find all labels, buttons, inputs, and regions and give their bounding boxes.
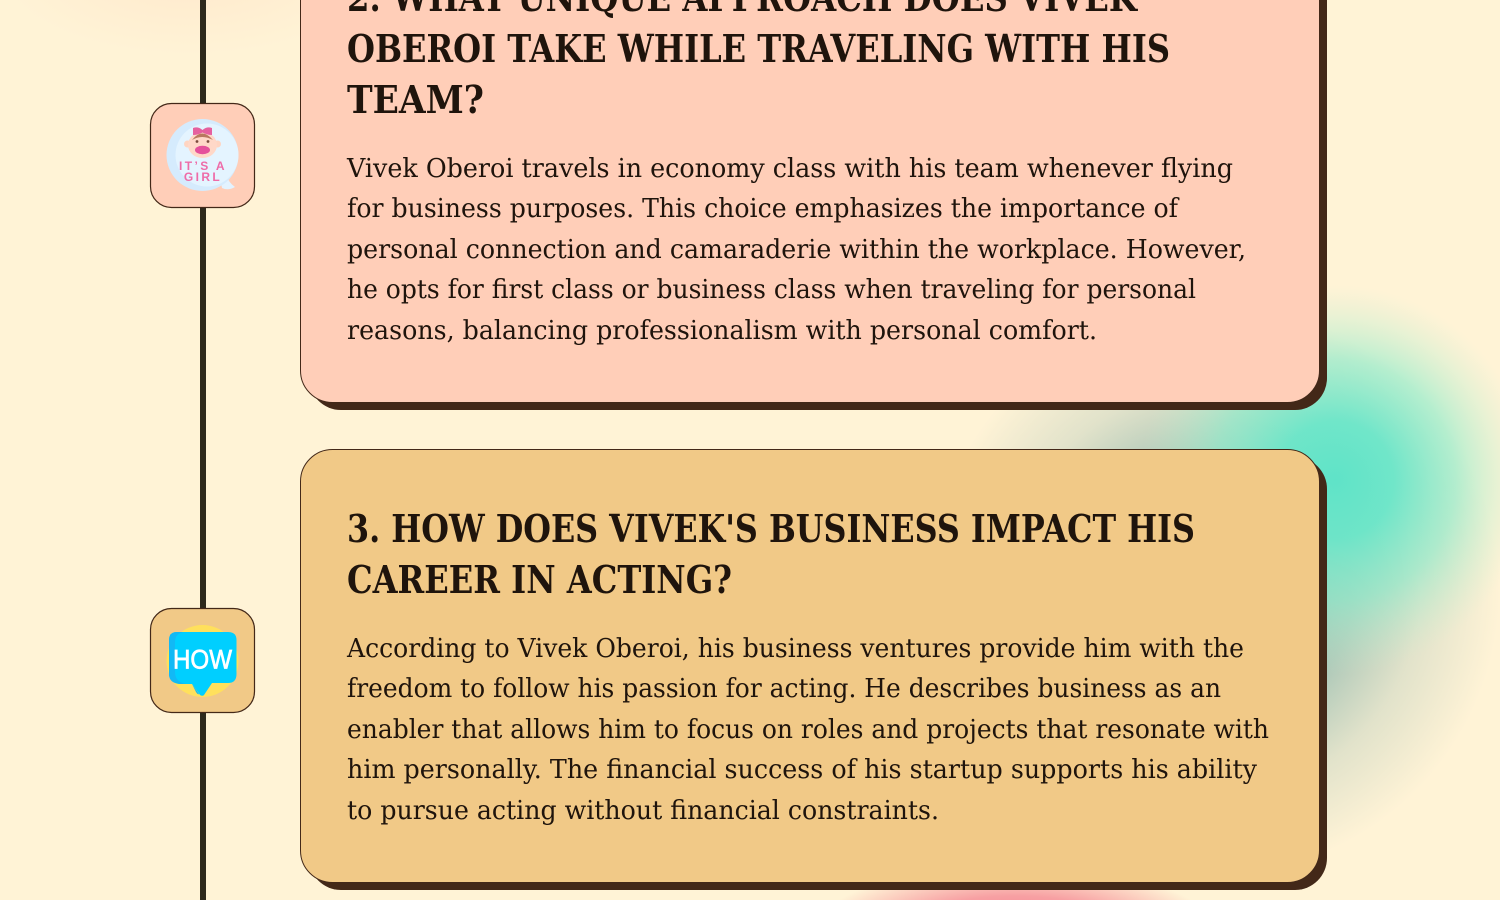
bubble shade <box>169 632 199 694</box>
glow: slate <box>930 305 1500 900</box>
glow: peach <box>0 0 380 70</box>
heading: question 3: CAREER IN ACTING? <box>347 557 732 602</box>
glow: teal <box>1140 285 1500 675</box>
body text: question 3: enabler that allows him to focus on roles and projects that resonate with <box>347 714 1269 745</box>
baby face <box>184 127 221 158</box>
panel: question 2 <box>300 0 1327 410</box>
panel: question 3 <box>300 450 1327 890</box>
card shadow: question 2 <box>309 0 1327 410</box>
heading: question 2 <box>347 0 1170 122</box>
badge label: IT’S A <box>179 159 227 173</box>
glow: red <box>820 860 1210 900</box>
heading: question 2: OBEROI TAKE WHILE TRAVELING WITH HIS <box>347 26 1170 71</box>
card body: question 3 <box>300 450 1320 882</box>
body text: question 3: freedom to follow his passion for acting. He describes business as an <box>347 673 1221 704</box>
heading: question 3 <box>347 506 1195 602</box>
body text: question 2 <box>346 153 1246 346</box>
body text: question 2: he opts for first class or business class when traveling for personal <box>347 274 1196 305</box>
card body: question 2 <box>300 0 1320 402</box>
body text: question 2: for business purposes. This choice emphasizes the importance of <box>347 193 1180 224</box>
icon: how badge <box>150 608 254 712</box>
body text: question 2: reasons, balancing professionalism with personal comfort. <box>347 315 1097 346</box>
body text: question 3 <box>346 633 1269 826</box>
speech bubble <box>166 119 238 191</box>
body text: question 2: personal connection and camaraderie within the workplace. However, <box>347 234 1246 265</box>
bubble label: HOW <box>173 644 232 674</box>
body text: question 3: to pursue acting without financial constraints. <box>347 795 939 826</box>
body text: question 2: Vivek Oberoi travels in economy class with his team whenever flying <box>346 153 1233 184</box>
body text: question 3: him personally. The financial success of his startup supports his ability <box>347 754 1257 785</box>
timeline line <box>200 0 206 900</box>
heading: question 2: TEAM? <box>347 77 484 122</box>
speech bubble <box>169 632 236 696</box>
card shadow: question 3 <box>309 457 1327 890</box>
heading: question 3: 3. HOW DOES VIVEK'S BUSINESS IMPACT HIS <box>347 506 1195 551</box>
icon: it's a girl badge <box>150 104 254 208</box>
icon: it's a girl badge: GIRL <box>184 170 222 184</box>
body text: question 3: According to Vivek Oberoi, his business ventures provide him with the <box>346 633 1244 664</box>
